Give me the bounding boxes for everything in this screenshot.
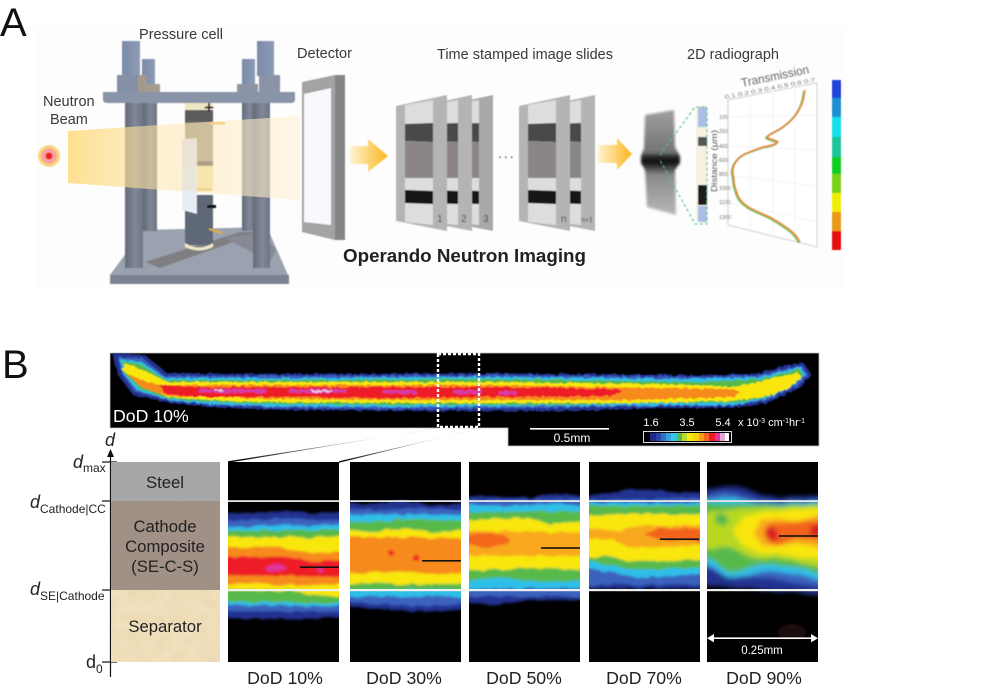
2D radiograph image: [641, 110, 680, 215]
axis labels: 0: [96, 662, 103, 676]
label: Time stamped image slides: Time stamped image slides: [437, 47, 613, 63]
colour scale legend: [643, 417, 805, 442]
heading: Operando Neutron Imaging: Operando Neutron Imaging: [343, 246, 586, 266]
heat map DoD 10%: [219, 462, 348, 688]
depth axis: [102, 449, 117, 677]
label: Pressure cell: Pressure cell: [139, 27, 223, 43]
layer: separator: [111, 590, 220, 662]
axis labels: [30, 430, 116, 676]
label: DoD 10%: [247, 668, 323, 688]
label: DoD 30%: [366, 668, 442, 688]
layer: separator: Separator: [128, 617, 202, 636]
beam source spot: [38, 145, 60, 167]
heat map DoD 70%: [580, 462, 709, 688]
colour scale legend: -1: [799, 418, 805, 425]
panel letter B: B: [2, 343, 29, 387]
colour scale legend: 5.4: [715, 417, 731, 429]
label: 2D radiograph: 2D radiograph: [687, 47, 779, 63]
time stamped slides: ...: [498, 145, 516, 161]
transmission chart: [710, 62, 817, 247]
label: DoD 10%: DoD 10%: [113, 406, 189, 426]
scale bar 0.5mm: [530, 428, 609, 445]
layer: cathode composite: [111, 501, 220, 590]
transmission chart: 400: [719, 144, 728, 150]
panel letter A: A: [0, 1, 27, 45]
colour scale legend: hr: [789, 417, 799, 429]
axis labels: max: [83, 461, 106, 475]
dotted zoom box: [438, 354, 479, 427]
label: DoD 90%: [726, 668, 802, 688]
panel B: heat maps: [2, 343, 827, 688]
axis labels: d: [105, 430, 116, 450]
label: DoD 50%: [486, 668, 562, 688]
transmission colour bar: [832, 80, 841, 250]
colour scale legend: cm: [765, 417, 783, 429]
label: Detector: Detector: [297, 46, 352, 62]
colour scale legend: x 10: [738, 417, 759, 429]
transmission chart: 1100: [719, 200, 731, 206]
axis labels: d: [30, 579, 40, 599]
sample holder tab: [182, 138, 197, 214]
time stamped slides: 1: [437, 214, 443, 225]
transmission chart: 0.1 0.2 0.3 0.4 0.5 0.6 0.7: [724, 78, 816, 101]
colour scale legend: -3: [759, 418, 765, 425]
heat map DoD 90%: [698, 462, 827, 688]
transmission chart: Distance (μm): [710, 130, 719, 192]
label: DoD 70%: [606, 668, 682, 688]
transmission chart: 1000: [719, 186, 731, 192]
label: Neutron Beam: Beam: [50, 112, 88, 128]
label: Neutron Beam: Neutron: [43, 94, 95, 110]
time stamped slides: 3: [483, 214, 489, 225]
pressure cell: [103, 41, 295, 284]
panel A: operando neutron imaging: [0, 1, 845, 290]
axis labels: SE|Cathode: [40, 589, 105, 603]
layer: cathode composite: Composite: [125, 537, 205, 556]
transmission chart: 100: [719, 115, 728, 121]
radiograph zoom strip: [660, 105, 707, 224]
neutron beam: [68, 116, 300, 200]
time stamped slides: [396, 95, 595, 231]
transmission chart: 600: [719, 158, 728, 164]
transmission chart: 800: [719, 172, 728, 178]
axis labels: d: [86, 652, 96, 672]
time stamped slides: n: [561, 214, 567, 225]
layer: steel: Steel: [146, 473, 184, 492]
axis labels: Cathode|CC: [40, 502, 106, 516]
transmission chart: 1300: [719, 215, 731, 221]
dimension arrow 0.25mm: 0.25mm: [741, 645, 783, 657]
scale bar 0.5mm: 0.5mm: [554, 431, 590, 445]
arrow to slides: [350, 139, 388, 172]
transmission chart: Transmission: [740, 62, 810, 90]
layer stack diagram: [111, 462, 220, 662]
colour scale legend: 3.5: [679, 417, 695, 429]
layer: steel: [111, 462, 220, 501]
colour scale legend: -1: [783, 418, 789, 425]
transmission chart: 200: [719, 129, 728, 135]
detector: [302, 75, 345, 240]
time stamped slides: 2: [461, 214, 467, 225]
pressure cell: +: [204, 98, 214, 117]
time stamped slides: n+1: [581, 217, 593, 224]
heat map DoD 50%: [460, 462, 589, 688]
layer: cathode composite: Cathode: [133, 517, 197, 536]
heat map DoD 30%: [341, 462, 470, 688]
axis labels: d: [73, 452, 83, 472]
dimension arrow 0.25mm: [707, 634, 818, 657]
colour scale legend: 1.6: [643, 417, 659, 429]
arrow to radiograph: [598, 138, 632, 170]
axis labels: d: [30, 492, 40, 512]
overview heat map DoD 10%: [110, 353, 819, 446]
layer: cathode composite: (SE-C-S): [131, 557, 199, 576]
zoom guide lines: [228, 428, 480, 463]
